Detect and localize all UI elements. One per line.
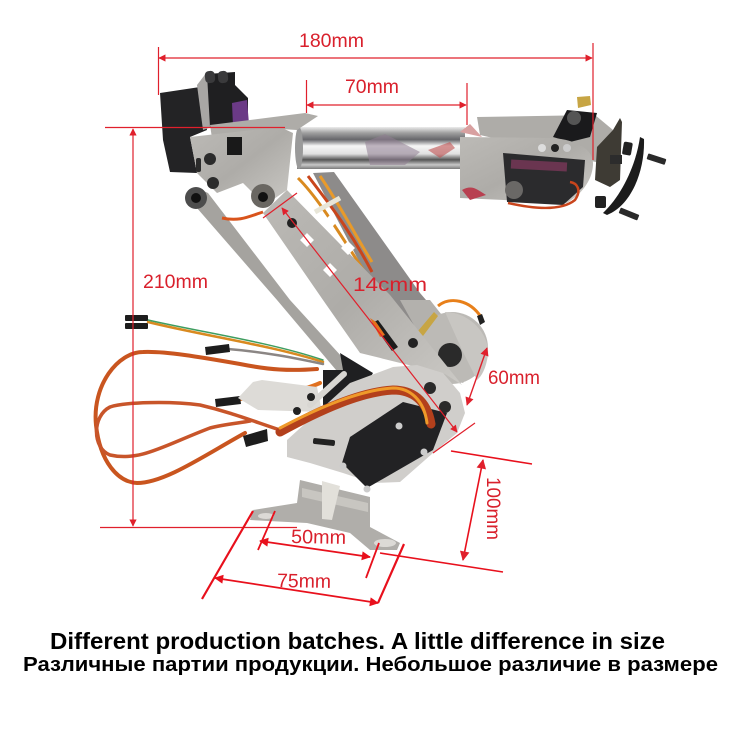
gripper hub and disc: [595, 118, 666, 221]
rear base bracket: [238, 380, 322, 412]
base servo: [340, 382, 451, 492]
robot arm photo illustration: [96, 71, 666, 550]
rear arm plates: [298, 172, 488, 384]
caption: Russian: Различные партии продукции. Небольшое различие в размере: [23, 654, 718, 676]
dimension: 14cm: 14cmm: [353, 274, 427, 296]
connectors: [125, 315, 268, 447]
dimension: 70mm: [306, 76, 467, 125]
dimension: 180mm: 180mm: [299, 30, 364, 52]
wrist servo: [503, 153, 585, 208]
thin link: [185, 184, 363, 383]
dimension: 75mm: [202, 511, 404, 603]
dimension: 180mm: [158, 30, 593, 160]
dimension: 50mm: [258, 511, 379, 578]
shoulder bracket: [190, 113, 318, 205]
dimension: 60mm: [467, 348, 540, 405]
dimension: 50mm: 50mm: [291, 526, 346, 549]
base front plate: [287, 365, 465, 483]
dimension: 100mm: 100mm: [482, 477, 504, 540]
rear black servo section: [323, 353, 373, 405]
dimension: 210mm: 210mm: [143, 271, 208, 293]
bundled servo cable: [280, 374, 431, 432]
wires inside arm: [298, 178, 370, 280]
base stand: [250, 480, 400, 550]
dimension: 14cm: [263, 193, 475, 453]
dimension: 210mm: [100, 128, 297, 528]
wrist bracket: [460, 96, 613, 203]
caption: English: Different production batches. A little difference in size: [50, 628, 665, 654]
shoulder servo: [160, 71, 249, 173]
dimension: 70mm: 70mm: [345, 76, 399, 98]
main arm link: [263, 190, 462, 385]
chrome tube: [295, 127, 465, 169]
dimension: 60mm: 60mm: [488, 367, 540, 389]
dimension: 100mm: [380, 451, 532, 572]
small base hardware: [293, 393, 335, 446]
dimension: 75mm: 75mm: [277, 570, 331, 593]
cables and connectors on the left: [96, 320, 323, 483]
